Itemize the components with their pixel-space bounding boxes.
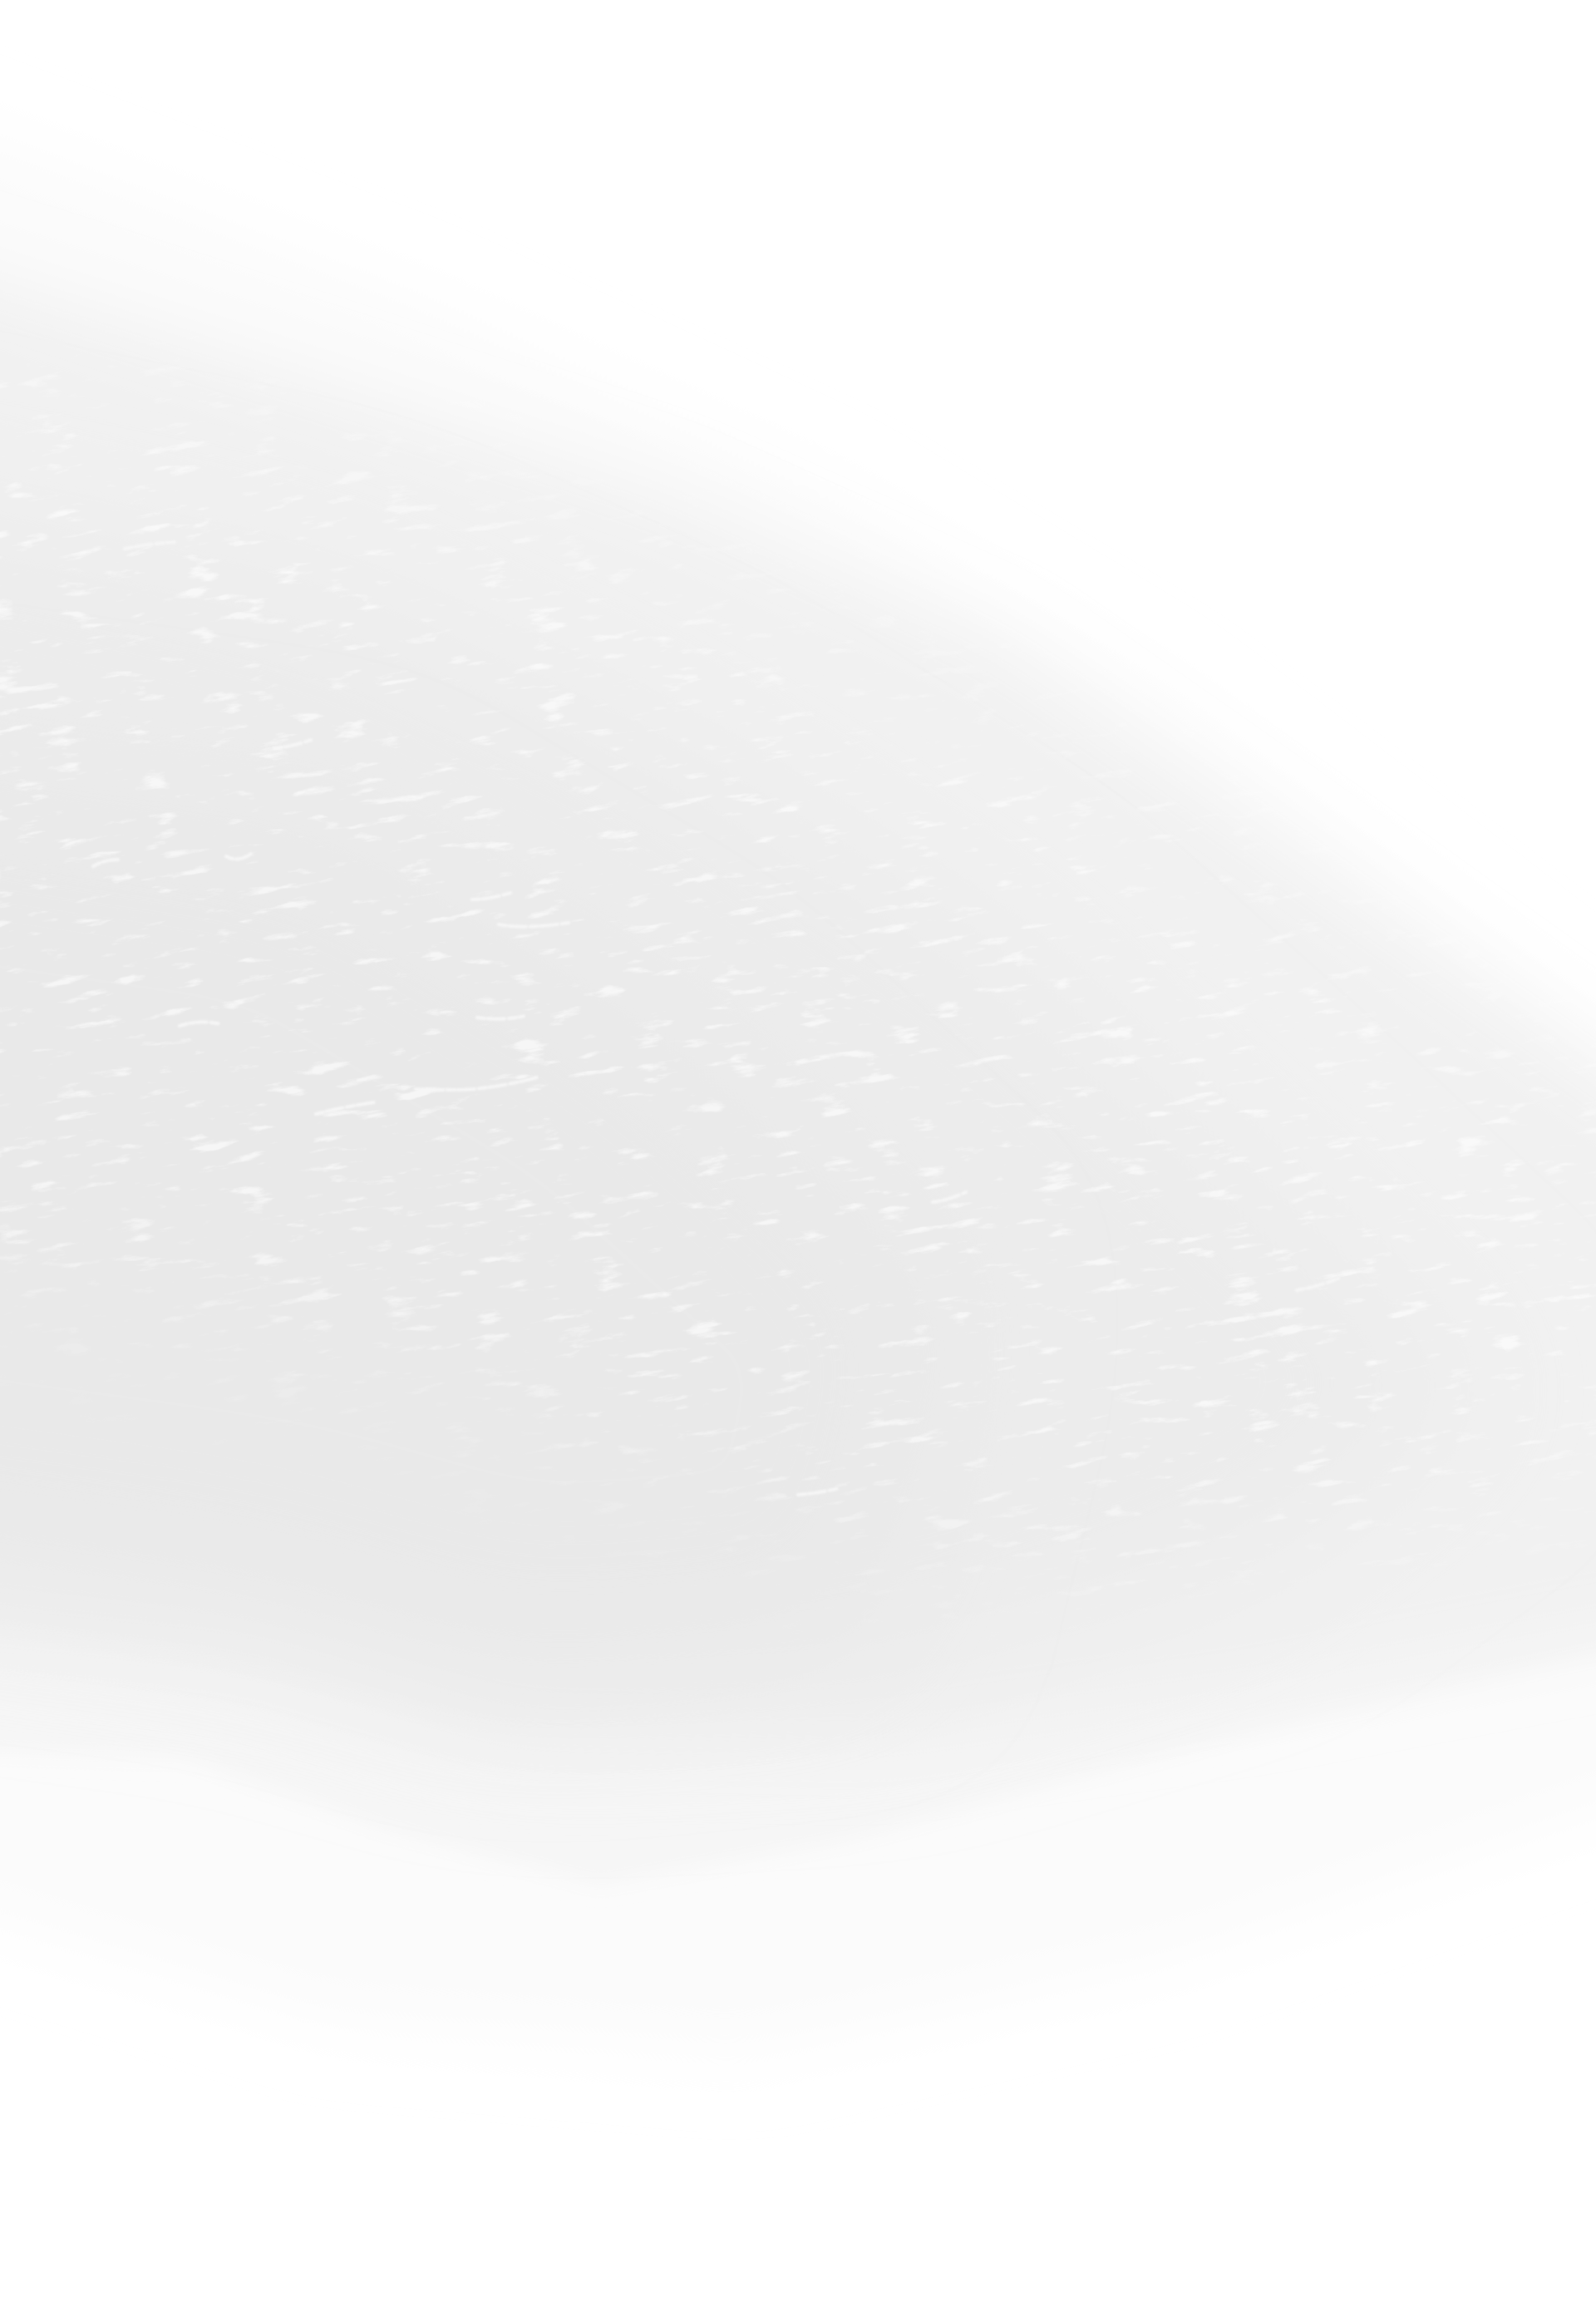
darker grey core — [0, 466, 1496, 1704]
white water-like highlights — [93, 542, 1338, 1495]
lower soft band — [0, 1247, 1596, 1885]
upper grey wedge — [0, 208, 1596, 1738]
darkest grey core — [0, 748, 956, 1671]
background: white page with grey textured wave — [0, 279, 1596, 1879]
ripple texture — [0, 494, 1579, 1512]
